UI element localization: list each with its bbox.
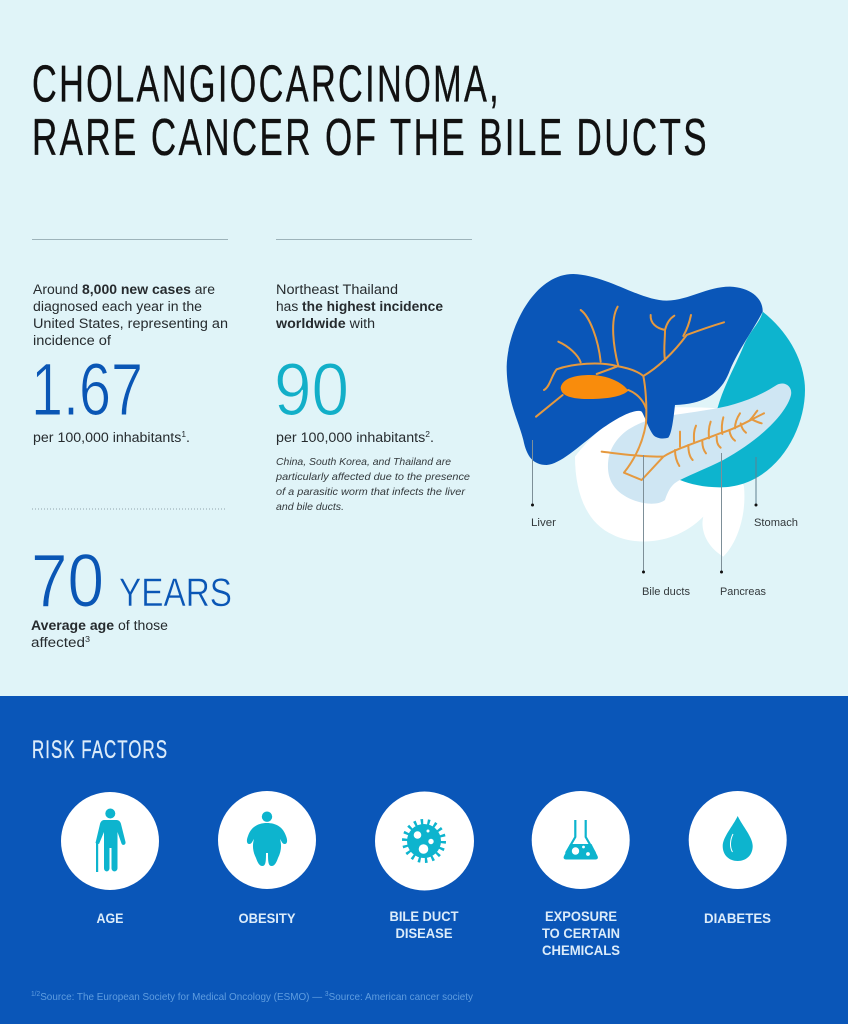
labels: risk factors: AGE — [96, 910, 124, 926]
diagram: anatomy of liver and bile ducts — [507, 274, 805, 598]
caption: per 100,000: 1 — [181, 430, 187, 439]
organ: gallbladder — [561, 375, 628, 399]
labels: risk factors: DISEASE — [396, 925, 452, 941]
labels: risk factors: CHEMICALS — [542, 942, 620, 958]
intro text: new cases — [33, 282, 228, 348]
intro text: highest incidence: has the highest incidence — [276, 299, 443, 314]
labels: risk factors: BILE DUCT — [390, 908, 459, 924]
note: parasitic worm: and bile ducts. — [276, 501, 344, 513]
label: bile ducts: Bile ducts — [642, 586, 690, 598]
intro text: highest incidence: worldwide with — [275, 316, 375, 331]
risk factor: chemicals — [532, 791, 630, 889]
label: liver — [531, 440, 556, 529]
caption: per 100,000: . — [186, 430, 190, 445]
risk factor: bile duct disease — [375, 792, 474, 890]
organ: pancreas — [608, 384, 791, 504]
bile ducts — [536, 307, 764, 480]
intro text: new cases: diagnosed each year in the — [33, 299, 202, 314]
intro text: new cases: United States, representing an — [33, 316, 228, 331]
intro text: new cases: Around 8,000 new cases are — [33, 282, 215, 297]
label: bile ducts — [642, 455, 690, 598]
risk factor: diabetes — [689, 791, 787, 889]
note: parasitic worm: China, South Korea, and Thailand are — [276, 456, 451, 468]
labels: risk factors: TO CERTAIN — [542, 925, 620, 941]
caption: average age — [31, 618, 168, 650]
icon: obese person — [247, 812, 287, 866]
icon: elderly person — [96, 808, 126, 872]
number: 70 years — [31, 538, 232, 622]
labels: risk factors — [96, 908, 771, 958]
text block: Northeast Thailand incidence — [274, 282, 470, 513]
organ: stomach — [680, 312, 805, 487]
title — [32, 54, 709, 166]
panel: risk factors — [0, 696, 848, 1024]
intro text: highest incidence — [275, 282, 443, 331]
footnote: sources: Source: American cancer society — [329, 991, 474, 1003]
caption: average age: Average age of those — [31, 618, 168, 633]
text block: United States incidence — [31, 282, 228, 445]
label: stomach: Stomach — [754, 517, 798, 529]
number: 90: 90 — [274, 348, 349, 431]
risk factor: age — [61, 792, 159, 890]
stat: average age — [31, 538, 232, 650]
label: stomach — [754, 457, 798, 529]
intro text: new cases: incidence of — [33, 333, 111, 348]
footnote: sources: Source: The European Society for Medical Oncology (ESMO) — — [40, 991, 325, 1003]
heading: risk factors: RISK FACTORS — [32, 736, 168, 764]
caption: per 100,000: 2 — [425, 430, 431, 439]
label: pancreas: Pancreas — [720, 586, 766, 598]
label: liver: Liver — [531, 517, 556, 529]
note: parasitic worm — [275, 456, 470, 513]
footnote: sources: 3 — [325, 991, 329, 998]
caption: average age: affected — [31, 635, 79, 650]
title: CHOLANGIOCARCINOMA, — [32, 54, 501, 112]
caption: per 100,000: per 100,000 inhabitants — [33, 430, 174, 445]
labels: risk factors: OBESITY — [238, 910, 296, 926]
number: 70 years: 70 — [31, 538, 104, 622]
icon: virus — [405, 822, 443, 860]
number: 70 years: YEARS — [119, 571, 232, 615]
note: parasitic worm: of a parasitic worm that infects the liver — [276, 486, 466, 498]
icon: drop — [723, 816, 753, 861]
icon: flask — [564, 820, 598, 860]
footnote: sources: 1/2 — [31, 991, 40, 998]
organ: duodenum — [575, 407, 744, 557]
labels: risk factors: EXPOSURE — [545, 908, 617, 924]
note: parasitic worm: particularly affected due to the presence — [275, 471, 470, 483]
number: 1.67: 1.67 — [31, 348, 143, 431]
labels: risk factors: DIABETES — [704, 910, 771, 926]
caption: average age: 3 — [85, 635, 91, 644]
caption: per 100,000: per 100,000 inhabitants — [276, 430, 417, 445]
organ: liver — [507, 274, 763, 465]
risk factor: obesity — [218, 791, 316, 889]
label: pancreas — [720, 453, 766, 598]
caption: per 100,000: . — [430, 430, 434, 445]
intro text: highest incidence: Northeast Thailand — [276, 282, 398, 297]
